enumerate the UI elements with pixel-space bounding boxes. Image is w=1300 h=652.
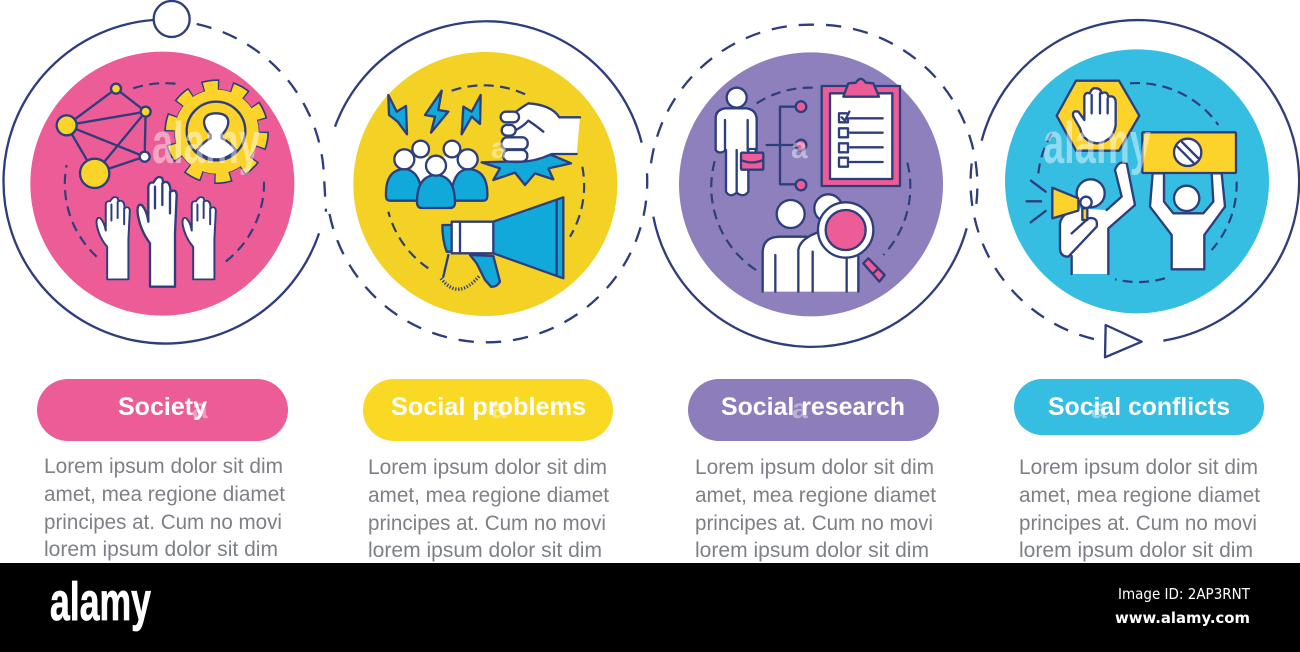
hand: left	[97, 197, 130, 279]
text block: Society	[44, 455, 285, 561]
yellow disc	[353, 52, 617, 316]
outer ring: social problems	[328, 21, 647, 342]
panel: society circle	[4, 1, 326, 344]
icon: network	[57, 84, 151, 188]
icon: protester with banner	[1142, 132, 1236, 269]
outer ring: social conflicts	[971, 20, 1299, 357]
text block: Social conflicts	[1019, 456, 1260, 562]
panel: social problems circle	[328, 21, 647, 342]
icon: people with magnifier	[763, 194, 885, 292]
heading pill: Society: Society	[118, 393, 207, 421]
inner dashed ring: social research	[711, 88, 910, 270]
purple disc	[679, 52, 943, 316]
watermark: alamy over icons: a	[491, 132, 508, 165]
text block: Society: lorem ipsum dolor sit dim	[44, 538, 278, 561]
text block: Social research: principes at. Cum no movi	[695, 512, 933, 535]
outer ring: society	[4, 1, 326, 344]
watermark: alamy over icons	[152, 111, 1151, 176]
cyan disc	[1005, 49, 1269, 313]
text block: Social research: amet, mea regione diamet	[695, 484, 936, 507]
icon: fist on burst	[482, 103, 580, 185]
icon: clipboard checklist	[822, 79, 900, 186]
text block: Social problems: amet, mea regione diamet	[368, 484, 609, 507]
icon: protester with megaphone	[1027, 162, 1135, 274]
watermark: alamy over icons: alamy	[152, 111, 260, 176]
text block: Society: Lorem ipsum dolor sit dim	[44, 455, 283, 478]
heading pill: Society	[37, 379, 288, 441]
icon: lightning bolts	[388, 91, 481, 134]
icon: raised hands	[97, 177, 216, 287]
text block: Society: amet, mea regione diamet	[44, 483, 285, 506]
text block: Social conflicts: principes at. Cum no movi	[1019, 512, 1257, 535]
icon: stop hand sign	[1057, 81, 1139, 151]
heading pill: Social conflicts: a	[1091, 393, 1107, 424]
panel: social conflicts circle	[971, 20, 1299, 357]
pink disc	[30, 52, 294, 316]
heading pill: Social conflicts	[1014, 379, 1264, 435]
text block: Social problems: lorem ipsum dolor sit dim	[368, 539, 602, 562]
hand: large	[137, 177, 177, 287]
icon: megaphone	[441, 197, 563, 289]
text block: Social conflicts: lorem ipsum dolor sit dim	[1019, 539, 1253, 562]
text block: Social problems: Lorem ipsum dolor sit dim	[368, 456, 607, 479]
text block: Social problems: principes at. Cum no movi	[368, 512, 606, 535]
heading pill: Social research: Social research	[721, 393, 905, 421]
heading pill: Social research: a	[792, 393, 808, 424]
website: www.alamy.com	[1115, 609, 1250, 627]
footer bar	[0, 563, 1300, 652]
heading pill: Social problems	[363, 379, 613, 441]
icon: businessman	[716, 88, 763, 195]
text block: Social conflicts: amet, mea regione diamet	[1019, 484, 1260, 507]
text block: Social research	[695, 456, 936, 562]
hand: right	[183, 197, 216, 279]
icon: hierarchy connector	[767, 101, 806, 190]
heading pill: Social research	[688, 379, 939, 441]
heading pill: Society: a	[192, 393, 208, 424]
text block: Social research: lorem ipsum dolor sit dim	[695, 539, 929, 562]
inner dashed ring: social problems	[388, 85, 584, 268]
panel: social research circle	[651, 25, 977, 347]
inner dashed ring: society	[65, 83, 264, 263]
heading pill: Social problems: Social problems	[391, 393, 586, 421]
heading pill: Social conflicts: Social conflicts	[1048, 393, 1230, 421]
outer ring: social research	[651, 25, 977, 347]
watermark: alamy over icons: alamy	[1043, 111, 1151, 176]
footer logo: alamy	[50, 572, 151, 632]
heading pill: Social problems: a	[491, 393, 507, 424]
arrowhead	[1105, 325, 1142, 357]
inner dashed ring: social conflicts	[1038, 83, 1237, 282]
text block: Social research: Lorem ipsum dolor sit dim	[695, 456, 934, 479]
text block: Society: principes at. Cum no movi	[44, 511, 282, 534]
image id: Image ID: 2AP3RNT	[1118, 585, 1251, 603]
watermark: alamy over icons: a	[791, 132, 808, 165]
icon: gear with person	[171, 86, 263, 178]
icon: crowd	[386, 141, 487, 208]
text block: Social conflicts: Lorem ipsum dolor sit dim	[1019, 456, 1258, 479]
text block: Social problems	[368, 456, 609, 562]
